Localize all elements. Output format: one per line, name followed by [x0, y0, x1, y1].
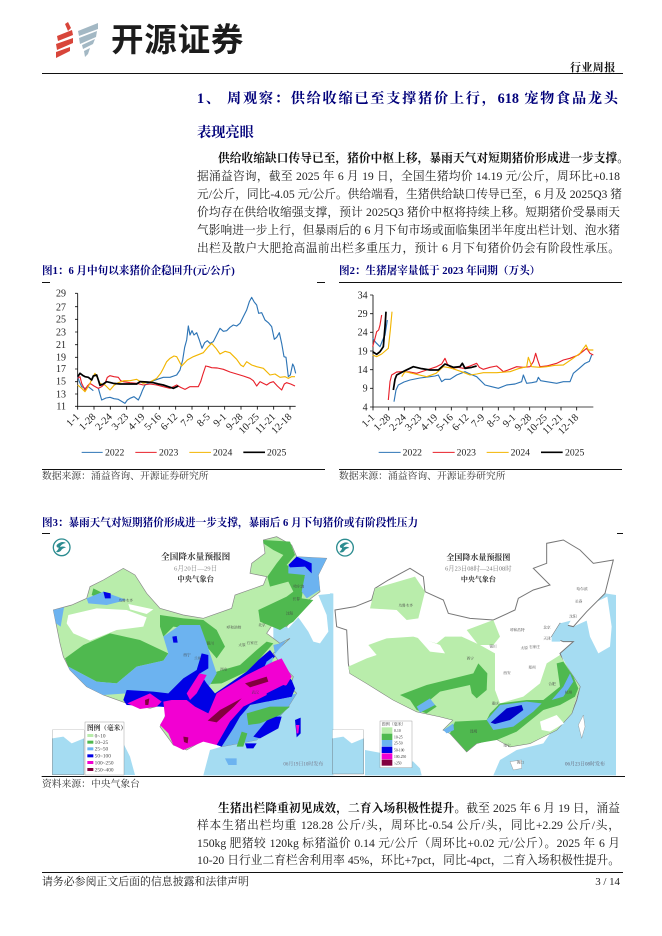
map: 10-day rainfall forecast: 银川: [207, 640, 214, 645]
line chart: hog slaughter volume: 4-19: [419, 412, 440, 434]
line chart: hog slaughter volume: 10-25: [525, 412, 550, 437]
logo wordmark: 开源证券: [111, 22, 244, 58]
figure 3 title: 图3：暴雨天气对短期猪价形成进一步支撑，暴雨后 6 月下旬猪价或有阶段性压力: [42, 518, 418, 529]
line chart: pig price: 3-23: [110, 412, 131, 433]
map: 24-hour rainfall forecast: 25-50: [394, 742, 403, 746]
line chart: pig price: 4-19: [126, 412, 147, 433]
figure 3 source: 资料来源：中央气象台: [42, 779, 140, 790]
map: 24-hour rainfall forecast: 南宁: [503, 743, 511, 748]
line chart: pig price: 2024: [213, 448, 232, 459]
map: 10-day rainfall forecast: 太原: [238, 642, 246, 647]
heading line 1: 1、 周观察：供给收缩已至支撑猪价上行，618 宠物食品龙头: [197, 91, 618, 107]
paragraph: pig price outlook: 气影响进一步上行，但暴雨后的 6 月下旬市场或面临集团半年度出栏计划、泡水猪: [197, 224, 620, 237]
line chart: hog slaughter volume: 5-16: [435, 412, 456, 434]
map: 10-day rainfall forecast: 6月20日—29日: [174, 565, 217, 573]
map: 24-hour rainfall forecast: 郑州: [528, 664, 536, 669]
map: 10-day rainfall forecast: 武汉: [252, 689, 259, 694]
paragraph: hog weight and restocking: 150kg 肥猪较 120kg 标猪溢价 0.14 元/公斤（周环比+0.02 元/公斤）。2025 年 6 月: [197, 837, 620, 850]
paragraph: pig price outlook: 出栏及散户大肥抢高温前出栏多重压力，预计 6 月下旬猪价仍会有阶段性承压。: [197, 242, 620, 255]
map: 10-day rainfall forecast: 中央气象台: [177, 575, 215, 584]
map: 10-day rainfall forecast: 西宁: [183, 652, 191, 657]
map: 10-day rainfall forecast: 乌鲁木齐: [118, 598, 133, 603]
map: 10-day rainfall forecast: 石家庄: [247, 640, 258, 645]
figure 1 title: 图1：6 月中旬以来猪价企稳回升(元/公斤): [42, 266, 235, 277]
line chart: hog slaughter volume: 2023: [457, 448, 476, 459]
paragraph: hog weight and restocking: [197, 802, 620, 867]
line chart: pig price: 2023: [159, 448, 178, 459]
map: 10-day rainfall forecast: 10~25: [95, 740, 109, 746]
line chart: hog slaughter volume: 8-5: [485, 412, 503, 430]
line chart: hog slaughter volume: 9-28: [513, 412, 534, 434]
footer disclaimer: 请务必参阅正文后面的信息披露和法律声明: [42, 876, 249, 888]
line chart: hog slaughter volume: 1-28: [372, 412, 393, 434]
line chart: hog slaughter volume: 2025: [565, 448, 584, 459]
line chart: pig price: 6-12: [159, 412, 180, 433]
line chart: hog slaughter volume: 3-23: [403, 412, 424, 434]
line chart: hog slaughter volume: [358, 290, 594, 459]
map: 24-hour rainfall forecast: [330, 538, 625, 777]
map: 24-hour rainfall forecast: 昆明: [470, 729, 478, 734]
line chart: pig price: 1-1: [65, 412, 82, 429]
line chart: hog slaughter volume: 9: [363, 384, 368, 395]
map: 24-hour rainfall forecast: 100-250: [394, 755, 406, 759]
map: 24-hour rainfall forecast: 杭州: [565, 689, 573, 694]
map: 24-hour rainfall forecast: 06月23日08时发布: [565, 760, 605, 767]
map: 24-hour rainfall forecast: 长春: [575, 598, 583, 603]
line chart: hog slaughter volume: 12-18: [556, 412, 581, 437]
map: 10-day rainfall forecast: 全国降水量预报图: [161, 550, 231, 561]
map: 10-day rainfall forecast: 250~400: [95, 767, 114, 773]
map: 10-day rainfall forecast: 兰州: [194, 655, 202, 660]
map: 24-hour rainfall forecast: 石家庄: [529, 644, 540, 649]
line chart: pig price: 27: [56, 303, 66, 314]
line chart: pig price: 23: [56, 327, 66, 338]
map: 10-day rainfall forecast: 沈阳: [286, 611, 294, 616]
map: 10-day rainfall forecast: 长春: [293, 596, 300, 601]
line chart: pig price: 2022: [105, 448, 124, 459]
line chart: pig price: 11-21: [254, 412, 278, 436]
map: 24-hour rainfall forecast: ≥250: [394, 761, 402, 765]
figure 1 source: 数据来源：涌益咨询、开源证券研究所: [42, 471, 209, 482]
map: 24-hour rainfall forecast: 中央气象台: [461, 575, 497, 584]
map: 10-day rainfall forecast: 50~100: [95, 754, 111, 760]
map: 10-day rainfall forecast: 哈尔滨: [293, 583, 305, 588]
line chart: pig price: 13: [56, 389, 66, 400]
line chart: pig price: 25: [56, 315, 66, 326]
line chart: pig price: 8-5: [195, 412, 213, 429]
line chart: hog slaughter volume: 2024: [511, 448, 530, 459]
map: 24-hour rainfall forecast: 银川: [489, 643, 497, 648]
paragraph: pig price outlook: 元/公斤，同比-4.05 元/公斤。供给端看，生猪供给缺口传导已至，6 月及 2025Q3 猪: [197, 188, 622, 201]
line chart: pig price: [56, 289, 296, 459]
paragraph: hog weight and restocking: 样本生猪出栏均重 128.28 公斤/头，周环比-0.54 公斤/头，同比+2.29 公斤/头，: [197, 819, 620, 832]
line chart: hog slaughter volume: 19: [358, 346, 368, 357]
line chart: hog slaughter volume: 4: [363, 402, 368, 413]
page number: 3 / 14: [595, 876, 620, 888]
line chart: hog slaughter volume: 11-21: [541, 412, 565, 437]
map: 10-day rainfall forecast: 06月19日10时发布: [283, 760, 323, 767]
line chart: pig price: 7-9: [179, 412, 196, 429]
paragraph: pig price outlook: 据涌益咨询，截至 2025 年 6 月 19 日，全国生猪均价 14.19 元/公斤，周环比+0.18: [197, 170, 620, 183]
line chart: hog slaughter volume: 34: [358, 290, 368, 301]
paragraph: pig price outlook: 供给收缩缺口传导已至，猪价中枢上移，暴雨天气对短期猪价形成进一步支撑。: [218, 152, 629, 165]
paragraph: pig price outlook: [197, 152, 629, 255]
line chart: pig price: 2025: [267, 448, 286, 459]
map: 24-hour rainfall forecast: 合肥: [548, 681, 556, 686]
map: 10-day rainfall forecast: 100~250: [95, 760, 114, 766]
line chart: pig price: 17: [56, 364, 66, 375]
line chart: pig price: 2-24: [94, 412, 115, 433]
map: 10-day rainfall forecast: 图例（毫米）: [87, 723, 127, 732]
paragraph: hog weight and restocking: 生猪出栏降重初见成效，二育入场积极性提升。截至 2025 年 6 月 19 日，涌益: [218, 802, 620, 815]
line chart: pig price: 19: [56, 353, 66, 364]
line chart: pig price: 1-28: [77, 412, 98, 433]
line chart: hog slaughter volume: 14: [358, 365, 368, 376]
line chart: pig price: 9-28: [224, 412, 245, 433]
map: 24-hour rainfall forecast: 海口: [517, 759, 524, 764]
map: 24-hour rainfall forecast: 太原: [521, 645, 528, 650]
map: 24-hour rainfall forecast: 0-10: [394, 729, 401, 733]
map: 10-day rainfall forecast: 25~50: [95, 747, 109, 753]
map: 24-hour rainfall forecast: 天津: [543, 635, 551, 640]
paragraph: pig price outlook: 价均存在供给收缩强支撑，预计 2025Q3 猪价中枢将持续上移。短期猪价受暴雨天: [197, 206, 620, 219]
logo: [56, 22, 244, 58]
line chart: hog slaughter volume: 7-9: [470, 412, 487, 430]
line chart: hog slaughter volume: 6-12: [450, 412, 471, 434]
line chart: pig price: 29: [56, 289, 66, 300]
line chart: hog slaughter volume: 24: [358, 328, 368, 339]
map: 24-hour rainfall forecast: 西安: [503, 670, 511, 675]
line chart: pig price: 5-16: [143, 412, 164, 433]
heading line 2: 表现亮眼: [197, 125, 254, 141]
line chart: pig price: 21: [56, 340, 66, 351]
line chart: hog slaughter volume: 1-1: [360, 412, 377, 430]
line chart: pig price: 12-18: [270, 412, 294, 437]
line chart: pig price: 10-25: [237, 412, 262, 437]
line chart: hog slaughter volume: 9-1: [501, 412, 518, 430]
map: 24-hour rainfall forecast: 50-100: [394, 748, 405, 752]
line chart: pig price: 15: [56, 377, 66, 388]
map: 24-hour rainfall forecast: 乌鲁木齐: [398, 603, 413, 608]
map: 10-day rainfall forecast: 西安: [220, 667, 228, 672]
map: 24-hour rainfall forecast: 10-25: [394, 735, 403, 739]
line chart: hog slaughter volume: 29: [358, 309, 368, 320]
map: 24-hour rainfall forecast: 全国降水量预报图: [446, 552, 510, 562]
line chart: pig price: 11: [56, 401, 66, 412]
map: 24-hour rainfall forecast: 图例（毫米）: [382, 720, 406, 726]
line chart: hog slaughter volume: 2022: [403, 448, 422, 459]
map: 10-day rainfall forecast: 0~10: [95, 733, 106, 739]
map: 10-day rainfall forecast: 北京: [258, 622, 266, 627]
map: 24-hour rainfall forecast: 哈尔滨: [577, 586, 588, 591]
line chart: hog slaughter volume: 2-24: [388, 412, 409, 434]
map: 24-hour rainfall forecast: 呼和浩特: [510, 627, 525, 632]
line chart: pig price: 9-1: [212, 412, 229, 429]
map: 24-hour rainfall forecast: 北京: [543, 624, 551, 629]
map: 24-hour rainfall forecast: 沈阳: [569, 614, 577, 619]
map: 24-hour rainfall forecast: 西宁: [467, 655, 474, 660]
icon: logo mark: [56, 22, 98, 58]
section heading: [197, 90, 618, 141]
map: 24-hour rainfall forecast: 6月23日08时—24日08时: [445, 564, 512, 573]
map: 10-day rainfall forecast: 呼和浩特: [227, 624, 242, 629]
map: 10-day rainfall forecast: [42, 536, 335, 777]
figure 2 title: 图2：生猪屠宰量低于 2023 年同期（万头）: [339, 266, 540, 277]
figure 2 source: 数据来源：涌益咨询、开源证券研究所: [339, 471, 506, 482]
map: 24-hour rainfall forecast: 重庆: [492, 700, 499, 705]
report type label: 行业周报: [570, 62, 616, 74]
paragraph: hog weight and restocking: 10-20 日行业二育栏舍利用率 45%，环比+7pct，同比-4pct，二育入场积极性提升。: [197, 854, 620, 867]
